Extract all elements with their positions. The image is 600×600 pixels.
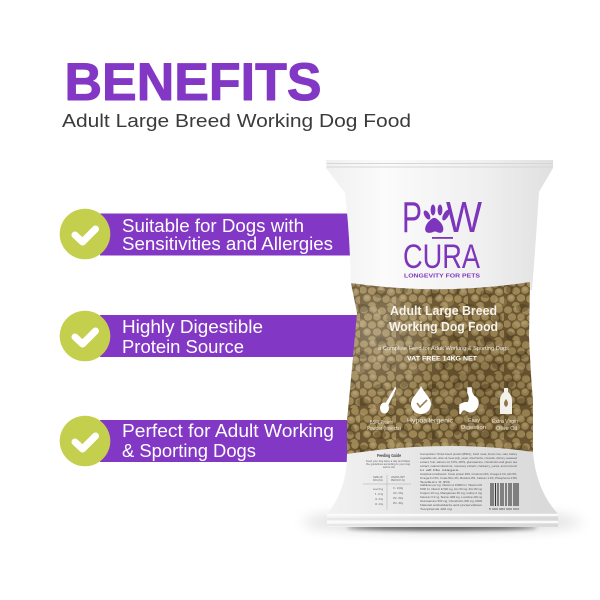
composition text: in all life stages.	[420, 468, 460, 472]
feeding guide: Less 5 kg	[373, 487, 383, 491]
composition text: Glucosamine 500 mg, Chondroitin 300 mg, MSM	[420, 499, 483, 503]
bag top foil	[326, 160, 553, 290]
composition text: Additives per kg: Vitamin A 15000 IU, Vitamin D3	[420, 483, 482, 487]
top seal lines	[327, 164, 553, 167]
product bag	[326, 160, 558, 527]
feeding guide: Feed your dog twice a day and follow	[366, 460, 410, 463]
icon captions: Extra Virgin	[492, 419, 518, 425]
feeding guide: 0 - 100g	[393, 486, 403, 490]
icon captions: Powder (Insects)	[367, 426, 401, 432]
feeding guide: 20 - 40 kg	[375, 502, 383, 506]
logo PAW CURA	[402, 193, 482, 280]
subtitle: Adult Large Breed Working Dog Food	[62, 110, 411, 131]
composition text: extract, fruit, salmon oil, FOS, MOS, glucosamine, chondroitin and green tea	[420, 460, 517, 464]
kibble body	[347, 282, 533, 460]
feeding guide: DOG (KG)	[373, 478, 383, 482]
feeding guide	[363, 453, 411, 510]
composition text: Omega-6 2.5%, Crude fibre 3%, Moisture 8%, Calcium 1.2%, Phosphorus 0.8%	[420, 476, 518, 480]
bag bottom panel	[327, 446, 558, 527]
logo PAW CURA: LONGEVITY FOR PETS	[404, 274, 480, 280]
feeding guide: 100 - 150g	[393, 491, 403, 495]
icon captions: Digestion	[461, 425, 486, 431]
benefit 2 banner	[60, 311, 360, 361]
feeding guide: 150 - 250g	[393, 496, 403, 500]
composition text: 1500 IU, Vitamin E 500 mg, Iron 60 mg, Zinc 80 mg	[420, 487, 482, 491]
barcode: 5 060 683 090 063	[489, 507, 519, 511]
logo PAW CURA: CURA	[403, 238, 480, 276]
feeding guide: and its size	[383, 466, 396, 469]
benefit 3 banner	[60, 416, 360, 466]
feeding guide: Feeding Guide	[377, 453, 402, 458]
icon captions: Easy	[468, 418, 480, 424]
composition text: Selenium 0.3 mg, Taurine 1000 mg, L-carnitine 200 mg	[420, 495, 482, 499]
icon captions: Hypoallergenic	[407, 418, 453, 424]
composition text	[420, 452, 518, 511]
benefit 3 banner: & Sporting Dogs	[122, 441, 256, 461]
composition text: Tocopherols 100 mg	[420, 507, 453, 511]
composition text: Composition: Dried insect protein (BSFL), fresh meat, brown rice, oats, barley	[420, 452, 518, 456]
benefit 2 banner: Protein Source	[122, 337, 244, 357]
benefit 2 banner: Highly Digestible	[122, 317, 263, 337]
bag descriptor	[378, 346, 509, 362]
icon captions: Olive Oil	[496, 426, 517, 432]
title: BENEFITS	[64, 53, 322, 112]
bag product heading: Adult Large Breed	[390, 304, 497, 318]
icon: stomach	[460, 388, 478, 414]
barcode	[489, 483, 519, 511]
icon captions	[367, 418, 518, 432]
icon: water drop	[411, 386, 431, 414]
bag product heading: Working Dog Food	[389, 320, 498, 334]
feeding guide: 250 - 400g	[393, 501, 403, 505]
benefit 1 banner	[60, 209, 360, 259]
feeding guide: AMOUNT	[391, 475, 405, 479]
bag descriptor: a Complete Feed for Adult Working & Sporting Dogs	[378, 346, 509, 352]
icon captions: BSFL Protein	[370, 420, 393, 426]
composition text: Copper 10 mg, Manganese 30 mg, Iodine 2 mg	[420, 491, 482, 495]
feeding guide: PER DAY (G)	[391, 478, 405, 482]
feeding guide: SIZE OF	[373, 475, 383, 479]
composition text: Natural antioxidants and preservatives	[420, 503, 483, 507]
composition text: vegetable oils, olive oil, beet pulp, yeast, dried herbs, minerals, chicory, seaweed	[420, 456, 517, 460]
icon: spoon	[380, 387, 396, 414]
feeding guide: 5 - 10 kg	[375, 492, 383, 496]
benefit 3 banner: Perfect for Adult Working	[122, 421, 334, 441]
bag floor shadow	[302, 513, 582, 531]
logo PAW CURA: P	[402, 193, 422, 242]
composition text: Sodium 0.3%	[420, 480, 451, 484]
logo PAW CURA: W	[446, 193, 482, 242]
feeding guide: 10 - 20 kg	[375, 497, 383, 501]
feeding guide: the guidelines according to your dog	[366, 463, 411, 466]
bag descriptor: VAT FREE 14KG NET	[407, 356, 477, 362]
icon: paw	[422, 204, 451, 233]
benefit 1 banner: Sensitivities and Allergies	[122, 234, 333, 254]
benefit 1 banner: Suitable for Dogs with	[122, 216, 304, 236]
icon: oil bottle	[500, 388, 512, 414]
composition text: Analytical constituents: Crude protein 26%, Crude fat 14%, Omega-3 1%, Ash 8%,	[420, 472, 517, 476]
bag product heading	[389, 304, 498, 334]
composition text: extract, natural vitamin E, rosemary extract, cranberry, yucca, and turmeric	[420, 464, 518, 468]
